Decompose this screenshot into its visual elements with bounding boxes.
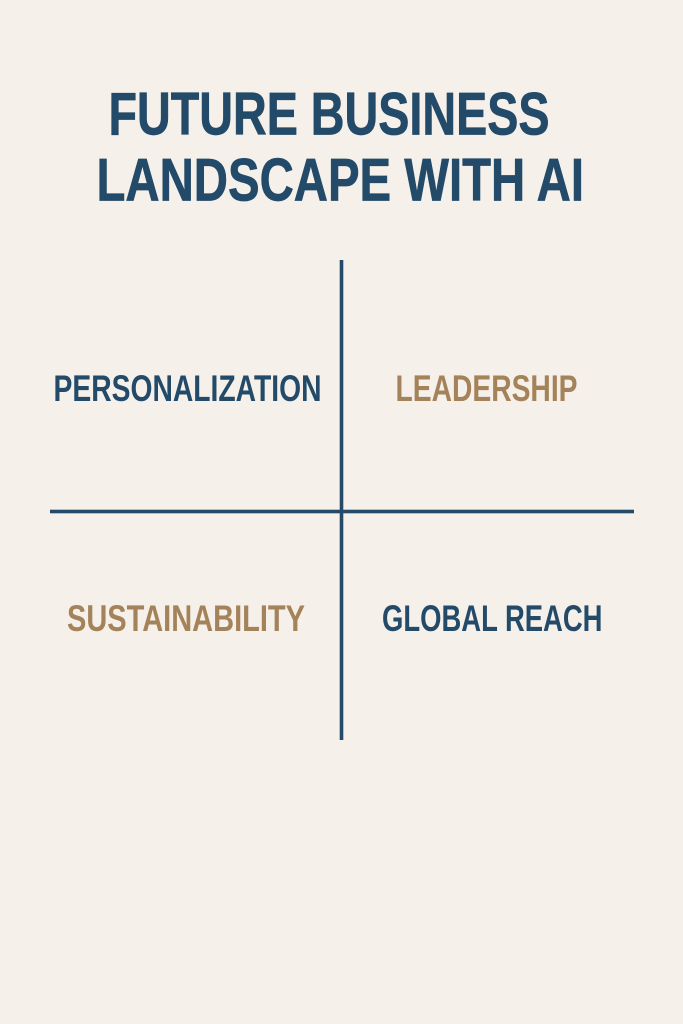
label: global reach: GLOBAL REACH bbox=[382, 598, 602, 639]
label: personalization: PERSONALIZATION bbox=[54, 368, 322, 409]
label: leadership: LEADERSHIP bbox=[396, 368, 578, 409]
quadrant cross divider bbox=[50, 260, 634, 740]
label: sustainability: SUSTAINABILITY bbox=[67, 598, 305, 639]
title: FUTURE BUSINESS bbox=[108, 80, 550, 148]
title bbox=[96, 80, 584, 214]
